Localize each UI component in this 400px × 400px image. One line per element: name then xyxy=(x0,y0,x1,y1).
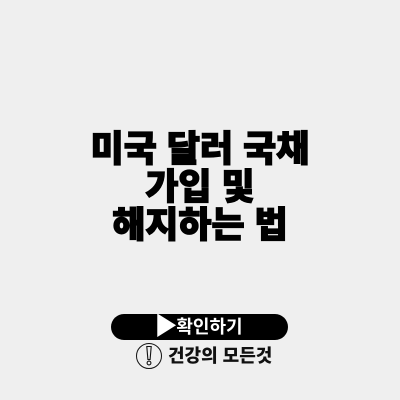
title: 가입 및 xyxy=(145,166,255,207)
icon: exclamation in circle xyxy=(136,343,162,369)
button: confirm: ▶ xyxy=(155,313,178,341)
title: 미국 달러 국채 xyxy=(91,128,309,168)
title: 해지하는 법 xyxy=(112,204,288,245)
button: confirm: 확인하기 xyxy=(176,317,243,337)
title xyxy=(91,128,309,245)
button: confirm xyxy=(111,314,288,340)
brand text: 건강의 모든것 xyxy=(168,346,272,366)
